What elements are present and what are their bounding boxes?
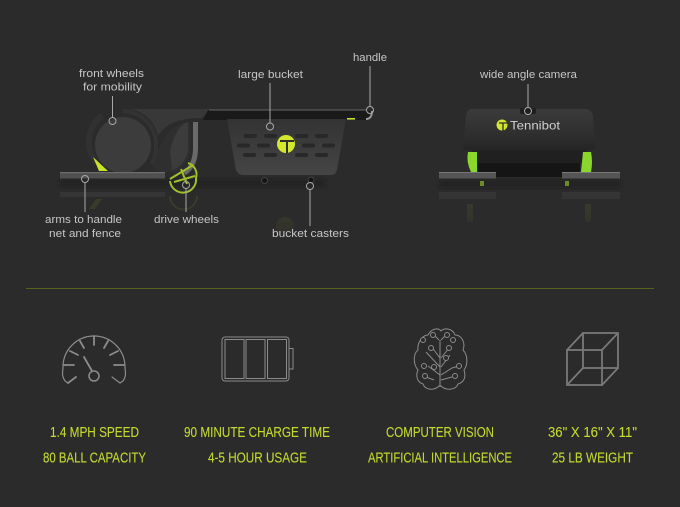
stat: charge and usage <box>184 424 330 466</box>
handle bar <box>203 110 372 120</box>
callout: wide angle camera: wide angle camera <box>479 69 578 81</box>
stat: speed and capacity: 80 BALL CAPACITY <box>43 450 146 466</box>
arm shell <box>183 122 198 175</box>
callout: wide angle camera <box>479 69 578 114</box>
stat: size and weight: 25 LB WEIGHT <box>552 450 633 466</box>
lower body <box>472 150 586 163</box>
stat: charge and usage: 4-5 HOUR USAGE <box>208 450 307 466</box>
icon: speedometer <box>62 336 126 383</box>
callout: handle: handle <box>353 52 387 64</box>
casters <box>262 178 268 184</box>
icon: battery <box>222 337 293 381</box>
bucket logo <box>277 135 295 153</box>
stat: charge and usage: 90 MINUTE CHARGE TIME <box>184 424 330 441</box>
callout: front wheels: front wheels <box>79 68 145 80</box>
callout: bucket casters <box>272 182 350 240</box>
front wheel <box>95 117 151 173</box>
stat: speed and capacity <box>43 424 146 466</box>
arm <box>60 172 165 178</box>
stat: size and weight: 36" X 16" X 11" <box>548 424 637 441</box>
callout: arms: net and fence <box>49 228 121 240</box>
stat: vision and AI: ARTIFICIAL INTELLIGENCE <box>368 450 512 466</box>
reflection front <box>439 192 620 222</box>
callout: front wheels <box>79 68 145 124</box>
callout: arms <box>45 176 122 240</box>
main shell <box>463 109 595 150</box>
callout: drive wheels: drive wheels <box>154 214 220 226</box>
icon: brain with circuit <box>414 329 467 389</box>
callout: bucket casters: bucket casters <box>272 228 350 240</box>
callout: drive wheels <box>154 182 220 226</box>
bucket <box>227 119 346 175</box>
brand name: Tennibot <box>510 118 561 132</box>
logo <box>496 120 508 130</box>
drive wheel <box>170 163 197 193</box>
robot side view <box>60 109 620 235</box>
floor shadow <box>60 181 325 185</box>
bucket slots <box>237 134 335 157</box>
S-shaped support <box>153 122 190 172</box>
callout: large bucket <box>238 69 303 130</box>
robot front view <box>439 108 620 222</box>
stat: vision and AI <box>368 424 512 466</box>
shell <box>130 109 210 136</box>
stat: vision and AI: COMPUTER VISION <box>386 424 494 441</box>
arms <box>439 172 496 178</box>
right green wheel <box>581 152 592 172</box>
left green wheel <box>467 152 477 172</box>
camera bump <box>520 108 536 114</box>
stat: speed and capacity: 1.4 MPH SPEED <box>50 424 139 441</box>
reflection side <box>60 192 294 224</box>
icon: cube <box>567 333 618 385</box>
callout: handle <box>353 52 387 114</box>
callout: large bucket: large bucket <box>238 69 303 81</box>
callout: front wheels: for mobility <box>83 82 143 94</box>
outer wheel ring <box>86 113 104 165</box>
stat: size and weight <box>548 424 637 466</box>
callout: arms: arms to handle <box>45 214 122 226</box>
